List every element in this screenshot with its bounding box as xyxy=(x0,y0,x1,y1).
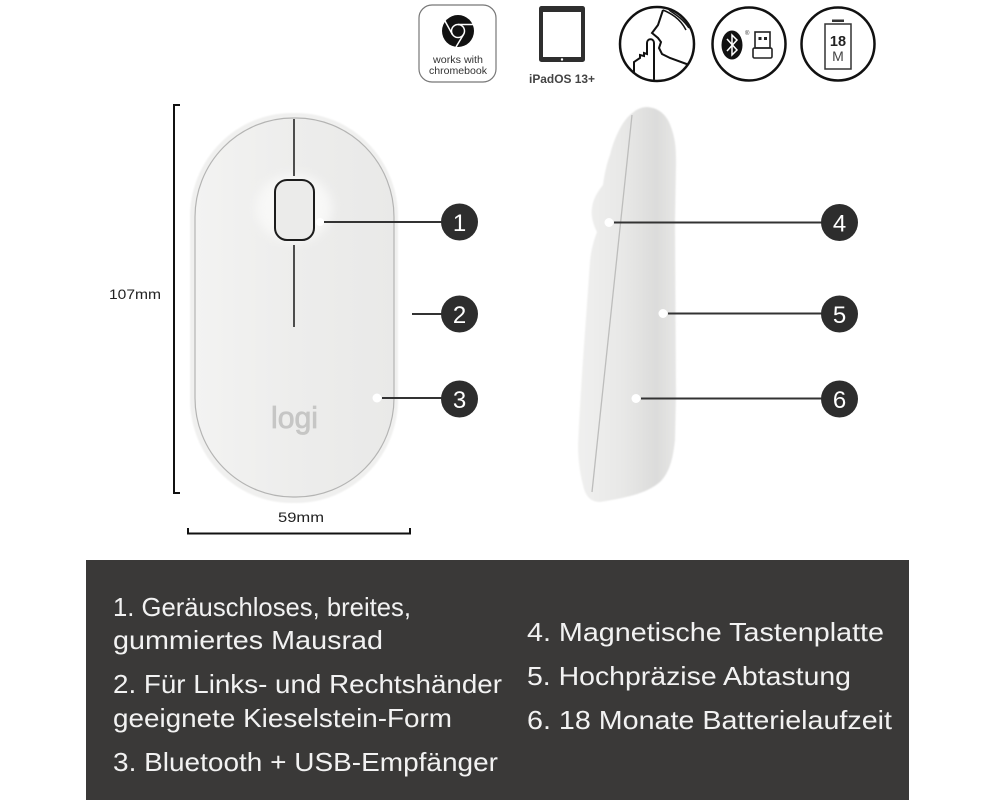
icon: works with chromebook: chromebook xyxy=(429,66,488,77)
logi logo: logi xyxy=(271,400,318,435)
callout 4: 4 xyxy=(833,210,846,238)
icon: iPad with iPadOS 13+ label xyxy=(529,6,595,86)
callout 6: 6 xyxy=(833,387,846,414)
feature 1 xyxy=(113,592,411,655)
feature 2 xyxy=(113,669,502,733)
button split lines xyxy=(293,119,295,327)
feature 2: 2. Für Links- und Rechtshänder xyxy=(113,669,502,699)
icon: bluetooth and USB receiver: ® xyxy=(745,30,750,37)
width label: 59mm xyxy=(278,509,324,525)
callout 5 xyxy=(658,296,858,332)
icon: 18 month battery xyxy=(802,8,874,80)
callout 1 xyxy=(316,204,478,240)
icon: works with chromebook: works with xyxy=(432,55,483,66)
icon: bluetooth and USB receiver xyxy=(712,8,786,80)
height label: 107mm xyxy=(109,286,161,302)
icon: 18 month battery: M xyxy=(832,48,844,64)
callout 6 xyxy=(632,380,858,418)
width dimension bracket xyxy=(188,509,410,534)
callout 5: 5 xyxy=(833,302,846,329)
feature 6: 6. 18 Monate Batterielaufzeit xyxy=(527,705,893,735)
callout 2: 2 xyxy=(453,302,466,329)
feature 3: 3. Bluetooth + USB-Empfänger xyxy=(113,747,498,777)
panel: feature list xyxy=(86,560,909,800)
callout 1: 1 xyxy=(453,210,466,237)
scroll wheel surround xyxy=(256,174,332,242)
callout 3: 3 xyxy=(453,387,466,414)
icon: works with chromebook xyxy=(419,5,496,82)
callout 2 xyxy=(412,296,478,332)
mouse side view xyxy=(578,107,676,502)
feature 4: 4. Magnetische Tastenplatte xyxy=(527,617,884,647)
height dimension bracket xyxy=(109,105,180,493)
callout 4 xyxy=(604,204,858,241)
feature 1: 1. Geräuschloses, breites, xyxy=(113,592,411,622)
mouse top view xyxy=(190,113,398,503)
icon: iPad with iPadOS 13+ label: iPadOS 13+ xyxy=(529,74,595,86)
feature 2: geeignete Kieselstein-Form xyxy=(113,703,452,733)
icon: 18 month battery: 18 xyxy=(830,34,846,50)
feature 5: 5. Hochpräzise Abtastung xyxy=(527,661,851,691)
feature 1: gummiertes Mausrad xyxy=(113,625,383,655)
callout 3 xyxy=(372,380,478,418)
icon: silent click xyxy=(620,7,694,82)
scroll wheel xyxy=(275,180,314,240)
